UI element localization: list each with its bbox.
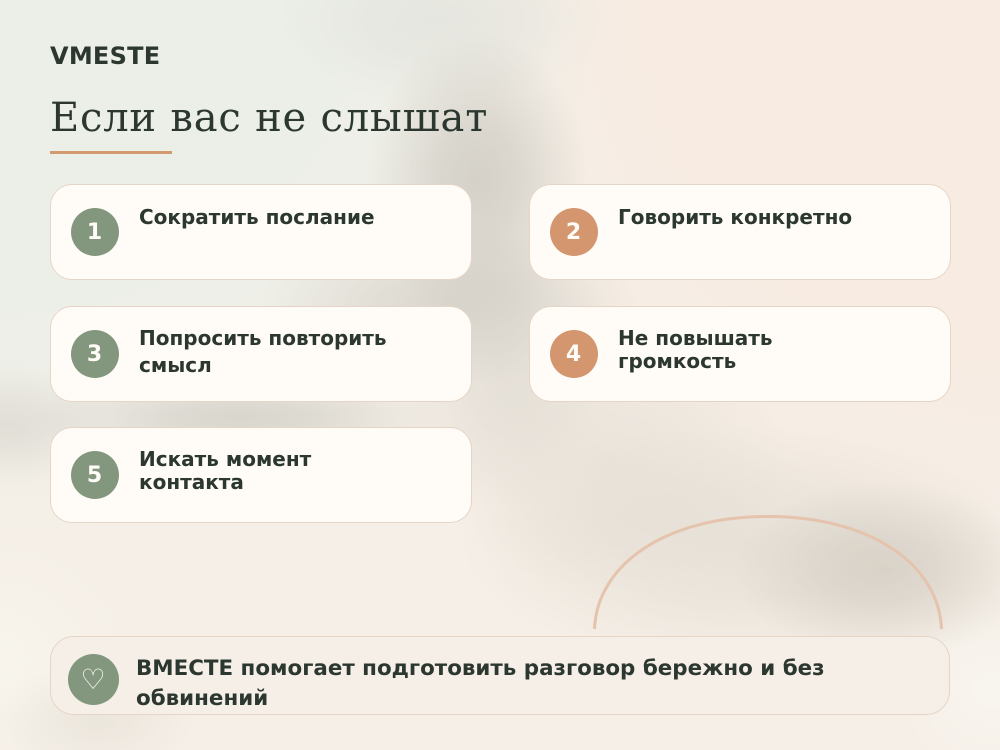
- footer callout: [50, 636, 950, 715]
- card 4 text: громкость: [618, 348, 736, 372]
- card 5 text: Искать момент: [139, 446, 311, 470]
- number badge 5: 5: [87, 462, 102, 488]
- card 2 text: Говорить конкретно: [618, 204, 852, 228]
- card 4 text: Не повышать: [618, 326, 773, 350]
- number badge 3: 3: [87, 342, 102, 366]
- brand name: VMESTE: [50, 42, 160, 70]
- number badge 2: 2: [566, 220, 581, 244]
- number badge 3: [70, 330, 118, 378]
- decorative arch: [593, 515, 943, 629]
- card 5 text: контакта: [139, 470, 244, 494]
- card 3 text: [139, 326, 387, 376]
- icon: heart: ♡: [80, 662, 106, 696]
- card 4: [529, 306, 950, 402]
- card 2: [529, 184, 950, 280]
- card 4 text: [618, 326, 773, 372]
- card 5 text: [139, 446, 312, 494]
- card 3 text: Попросить повторить: [139, 326, 387, 350]
- number badge 2: [550, 208, 598, 256]
- card 3 text: смысл: [139, 352, 212, 376]
- title: Если вас не слышат: [50, 95, 488, 141]
- card 1: [50, 184, 472, 280]
- title underline: [50, 151, 172, 154]
- card 1 text: Сократить послание: [139, 204, 375, 228]
- number badge 4: 4: [566, 342, 581, 366]
- card 5: [50, 427, 472, 523]
- footer text: ВМЕСТЕ помогает подготовить разговор бережно и без: [136, 656, 825, 680]
- footer text: обвинений: [136, 686, 268, 710]
- footer text: [136, 656, 825, 710]
- number badge 4: [550, 330, 598, 378]
- number badge 1: [70, 208, 118, 256]
- card 3: [50, 306, 472, 402]
- icon: heart: [68, 654, 118, 704]
- number badge 1: 1: [87, 220, 102, 244]
- number badge 5: [70, 450, 118, 498]
